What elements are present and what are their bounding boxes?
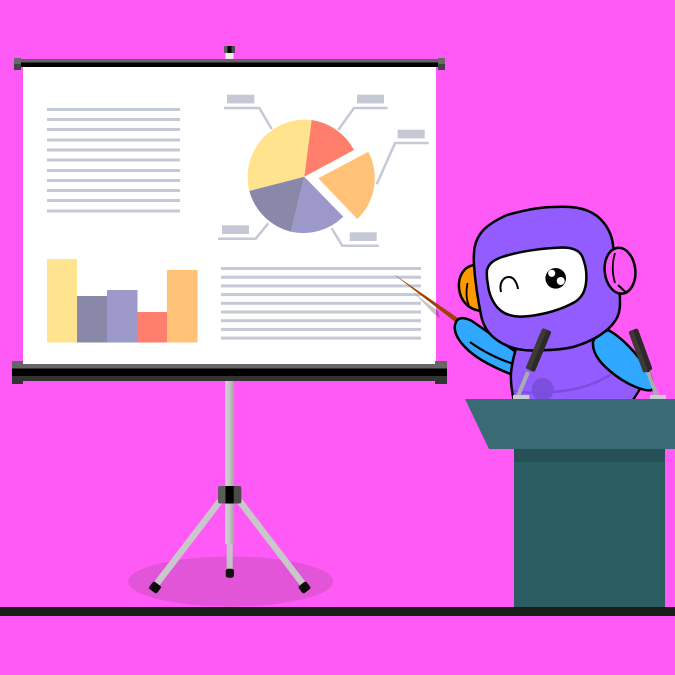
- pie label: bottom right: [332, 228, 379, 246]
- top hanger knob: [224, 46, 235, 59]
- pie label: top left: [224, 95, 272, 129]
- right ear: [602, 246, 638, 295]
- right arm: [593, 330, 653, 400]
- white screen panel: [23, 67, 436, 364]
- pointer stick shadow: [414, 293, 440, 318]
- pie chart: [248, 120, 375, 233]
- right microphone: [628, 328, 666, 400]
- pie label: bottom left: [218, 223, 268, 239]
- bottom roller bar: [12, 361, 447, 384]
- podium: [465, 399, 675, 607]
- text block: lower right lines: [221, 267, 421, 340]
- head: [474, 207, 620, 351]
- face visor: [487, 248, 586, 317]
- left ear: [459, 265, 482, 311]
- raised left arm: [455, 318, 516, 375]
- winking eye: [500, 277, 518, 292]
- podium base: [514, 449, 665, 607]
- pie label: right: [377, 130, 429, 184]
- ground line: [0, 607, 675, 616]
- projector screen: [12, 46, 447, 384]
- pie label: top right: [338, 95, 388, 130]
- body: [511, 335, 642, 402]
- floor shadow: [128, 556, 333, 606]
- bar chart: [47, 259, 198, 342]
- robot character: [455, 207, 653, 402]
- pointer stick: [394, 274, 458, 322]
- tripod stand: [148, 381, 311, 594]
- text block: upper left lines: [47, 108, 180, 212]
- podium shadow band: [514, 449, 665, 462]
- top roller bar: [14, 58, 445, 70]
- left microphone: [513, 328, 552, 400]
- podium top: [465, 399, 675, 449]
- open eye: [545, 268, 566, 289]
